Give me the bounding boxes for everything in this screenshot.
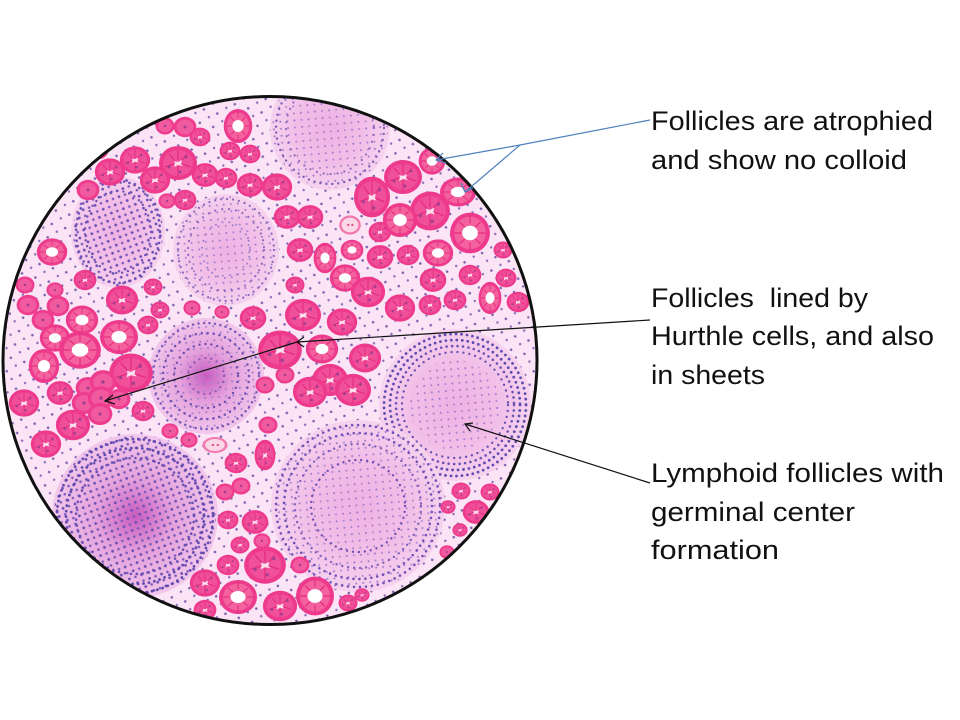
leader arrows to Hurthle cells xyxy=(105,320,650,404)
leader arrow to lymphoid follicle xyxy=(465,423,650,483)
label: lymphoid follicles: Lymphoid follicles with xyxy=(651,458,944,488)
label: lymphoid follicles: formation xyxy=(651,535,779,565)
label: atrophied follicles: and show no colloid xyxy=(651,145,907,175)
lymphoid follicles with germinal centers xyxy=(52,66,531,598)
label: atrophied follicles: Follicles are atrophied xyxy=(651,106,933,136)
microscope field: circular tissue section xyxy=(3,66,537,624)
label: lymphoid follicles xyxy=(651,458,944,565)
atrophied thyroid follicles xyxy=(9,109,529,621)
label: Hurthle cells: Follicles lined by xyxy=(651,283,869,313)
leader arrows to atrophied follicles xyxy=(436,120,650,192)
infographic canvas xyxy=(2,95,942,626)
label: Hurthle cells: in sheets xyxy=(651,360,765,390)
field outline xyxy=(3,96,537,624)
label: atrophied follicles xyxy=(651,106,933,175)
label: lymphoid follicles: germinal center xyxy=(651,497,855,527)
label: Hurthle cells: Hurthle cells, and also xyxy=(651,321,934,351)
label: Hurthle cells xyxy=(651,283,934,390)
